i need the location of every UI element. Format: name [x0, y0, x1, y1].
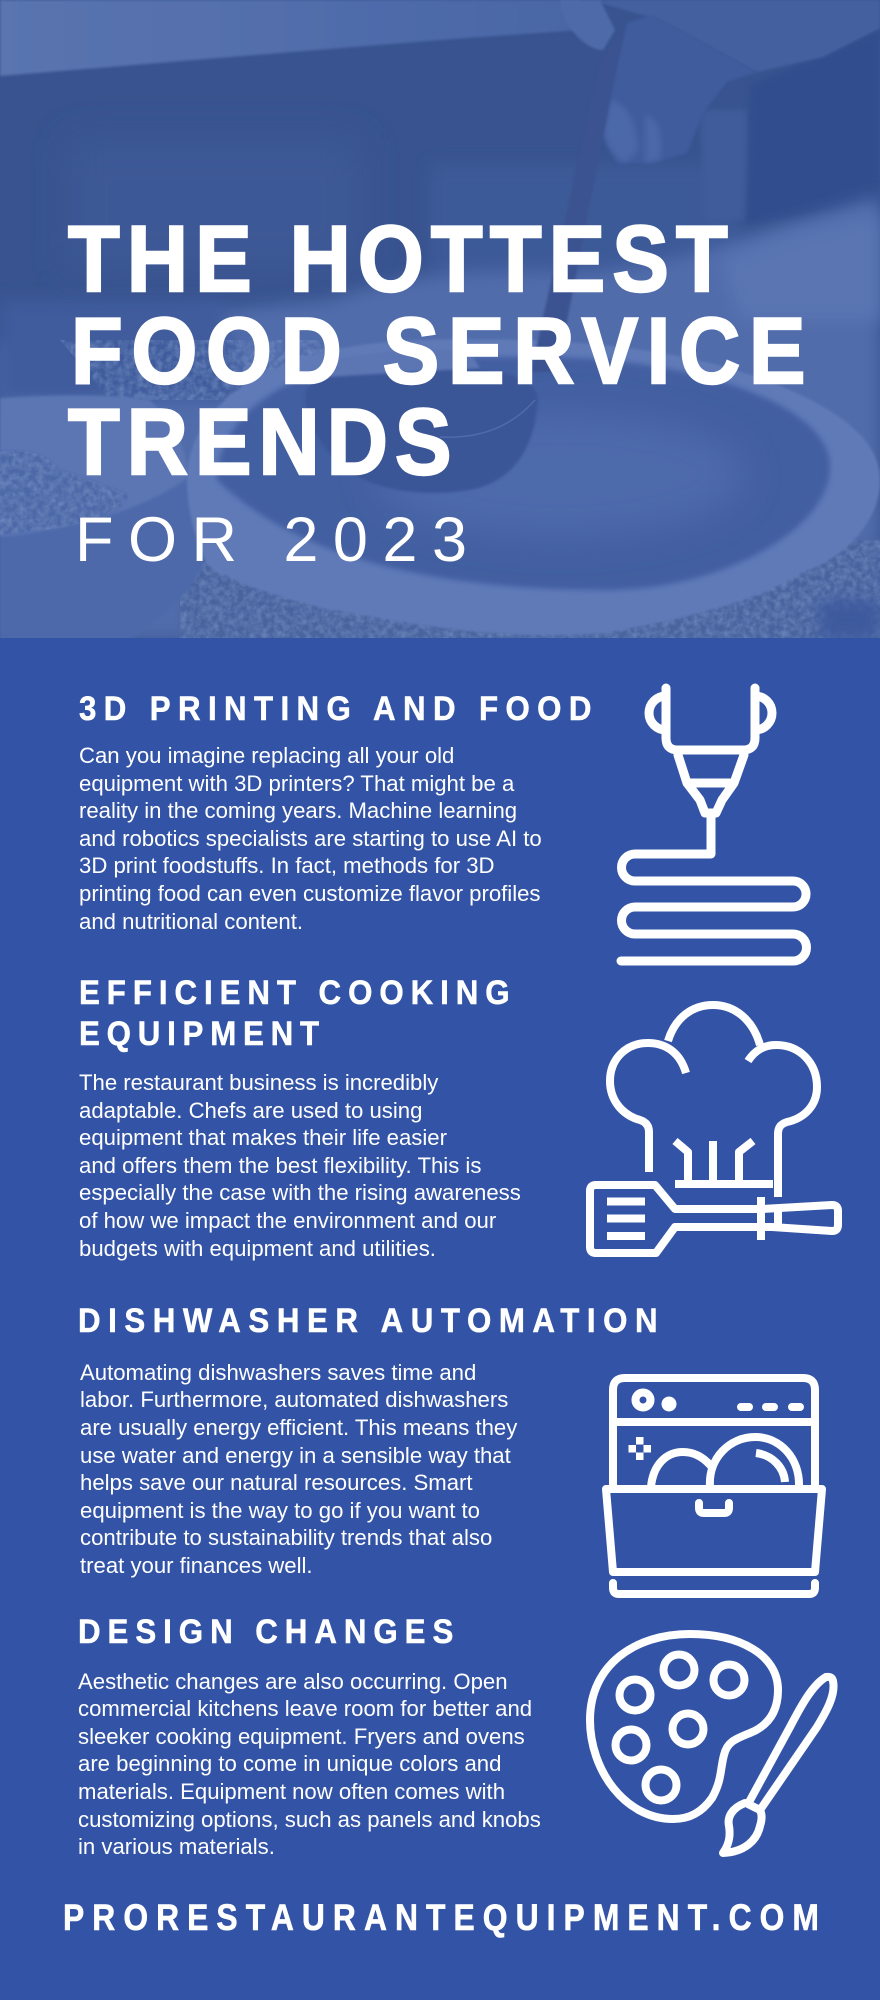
- body text: 3D print foodstuffs. In fact, methods for 3D: [79, 853, 495, 878]
- body text: and nutritional content.: [79, 909, 303, 934]
- body text: [79, 743, 542, 934]
- body text: [79, 1070, 521, 1261]
- subtitle: FOR 2023: [75, 505, 467, 575]
- pizza sauce: [217, 357, 830, 590]
- heading: [79, 973, 510, 1052]
- section: 3D printing and food: [79, 689, 591, 934]
- body text: use water and energy in a sensible way that: [80, 1443, 511, 1468]
- body text: materials. Equipment now often comes with: [78, 1779, 505, 1804]
- body text: and offers them the best flexibility. This is: [79, 1153, 481, 1178]
- body text: are usually energy efficient. This means they: [80, 1415, 518, 1440]
- body text: equipment is the way to go if you want to: [80, 1498, 480, 1523]
- body text: [80, 1360, 518, 1578]
- body text: reality in the coming years. Machine learning: [79, 798, 517, 823]
- icon: paint palette and brush: [590, 1634, 834, 1853]
- body text: budgets with equipment and utilities.: [79, 1236, 436, 1261]
- body text: in various materials.: [78, 1834, 275, 1859]
- header photo: chef ladling sauce on pizza dough, blue tinted: [0, 0, 880, 640]
- body text: labor. Furthermore, automated dishwashers: [80, 1387, 508, 1412]
- heading: EFFICIENT COOKING: [79, 973, 510, 1011]
- body text: Can you imagine replacing all your old: [79, 743, 454, 768]
- icon: 3D printer nozzle drawing a line: [621, 688, 806, 961]
- body text: customizing options, such as panels and knobs: [78, 1807, 541, 1832]
- title: [68, 206, 805, 494]
- body text: contribute to sustainability trends that also: [80, 1525, 492, 1550]
- body text: of how we impact the environment and our: [79, 1208, 496, 1233]
- icon: chef hat and spatula: [590, 1005, 838, 1253]
- heading: EQUIPMENT: [79, 1014, 319, 1052]
- footer website: PRORESTAURANTEQUIPMENT.COM: [63, 1898, 819, 1939]
- section: efficient cooking equipment: [79, 973, 521, 1261]
- icon: dishwasher: [606, 1378, 822, 1594]
- body text: equipment with 3D printers? That might be a: [79, 771, 515, 796]
- ladle handle: [532, 98, 610, 372]
- body text: [78, 1669, 541, 1859]
- body text: The restaurant business is incredibly: [79, 1070, 439, 1095]
- bowl of ingredients at left: [0, 395, 187, 538]
- body text: sleeker cooking equipment. Fryers and ovens: [78, 1724, 525, 1749]
- heading: DISHWASHER AUTOMATION: [78, 1301, 658, 1339]
- ladle: [305, 368, 538, 493]
- section: design changes: [78, 1612, 541, 1859]
- body text: commercial kitchens leave room for better and: [78, 1696, 532, 1721]
- body text: Automating dishwashers saves time and: [80, 1360, 476, 1385]
- title: THE HOTTEST: [68, 206, 728, 311]
- body text: are beginning to come in unique colors and: [78, 1751, 501, 1776]
- pizza dough: [187, 339, 880, 635]
- heading: DESIGN CHANGES: [78, 1612, 453, 1650]
- body text: helps save our natural resources. Smart: [80, 1470, 473, 1495]
- body text: and robotics specialists are starting to use AI to: [79, 826, 542, 851]
- title: TRENDS: [68, 389, 451, 494]
- section: dishwasher automation: [78, 1301, 658, 1578]
- body text: Aesthetic changes are also occurring. Open: [78, 1669, 508, 1694]
- body text: especially the case with the rising awareness: [79, 1180, 521, 1205]
- title: FOOD SERVICE: [71, 298, 805, 403]
- stone worktop behind the pizza: [0, 195, 880, 640]
- body text: treat your finances well.: [80, 1553, 313, 1578]
- body text: adaptable. Chefs are used to using: [79, 1098, 422, 1123]
- chef sleeve and hand: [590, 0, 880, 72]
- heading: 3D PRINTING AND FOOD: [79, 689, 591, 727]
- body text: printing food can even customize flavor profiles: [79, 881, 541, 906]
- body text: equipment that makes their life easier: [79, 1125, 447, 1150]
